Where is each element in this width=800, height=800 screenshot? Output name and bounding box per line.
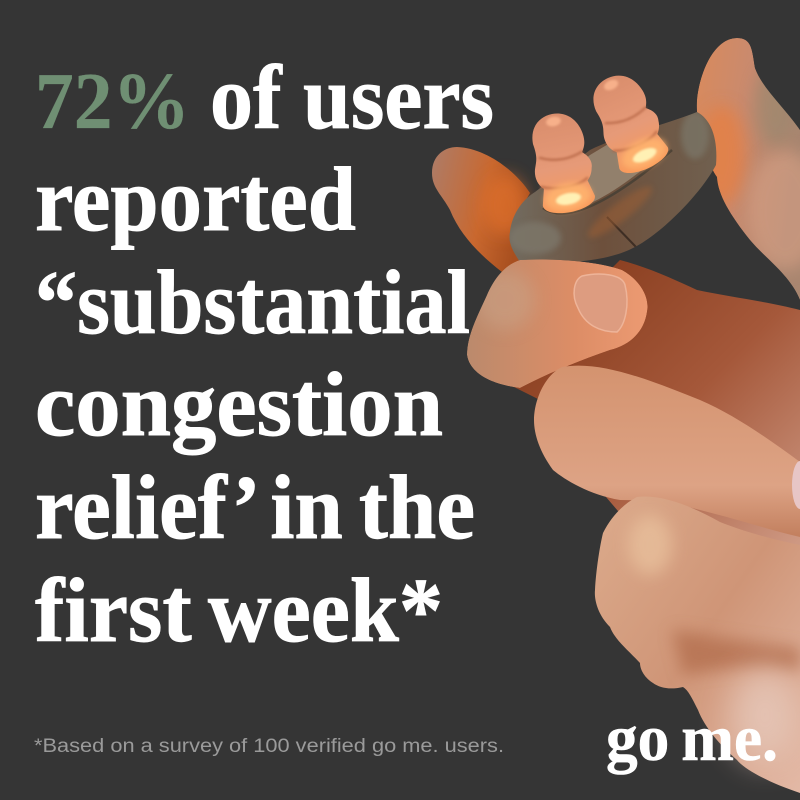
hand: index finger at right xyxy=(697,38,800,300)
footnote: *Based on a survey of 100 verified go me. users. xyxy=(34,736,504,757)
headline line 5: relief’ in the xyxy=(35,457,475,558)
headline line 1: 72% xyxy=(35,58,190,146)
hand: lower fingers xyxy=(595,497,800,793)
hand: palm xyxy=(500,260,800,560)
device: left nozzle xyxy=(524,108,600,217)
lower palm highlight xyxy=(731,669,799,761)
photo: hand holding device xyxy=(432,38,800,793)
headline line 3: “substantial xyxy=(35,252,470,353)
headline line 2: reported xyxy=(35,149,356,250)
hand: middle finger xyxy=(534,366,800,537)
hand: thumb with nail xyxy=(467,259,648,388)
headline line 4: congestion xyxy=(35,354,443,455)
hand: left finger behind device xyxy=(432,147,530,272)
headline xyxy=(35,47,494,661)
shadow under lower finger xyxy=(672,630,800,676)
logo: go me. xyxy=(606,702,778,775)
fingernail at right xyxy=(792,461,800,509)
headline line 1: of users xyxy=(210,47,494,148)
headline line 1 xyxy=(35,47,494,148)
headline line 6: first week* xyxy=(35,560,443,661)
device: right nozzle xyxy=(582,66,675,180)
knuckle highlight xyxy=(628,515,672,575)
device: body xyxy=(509,111,716,263)
